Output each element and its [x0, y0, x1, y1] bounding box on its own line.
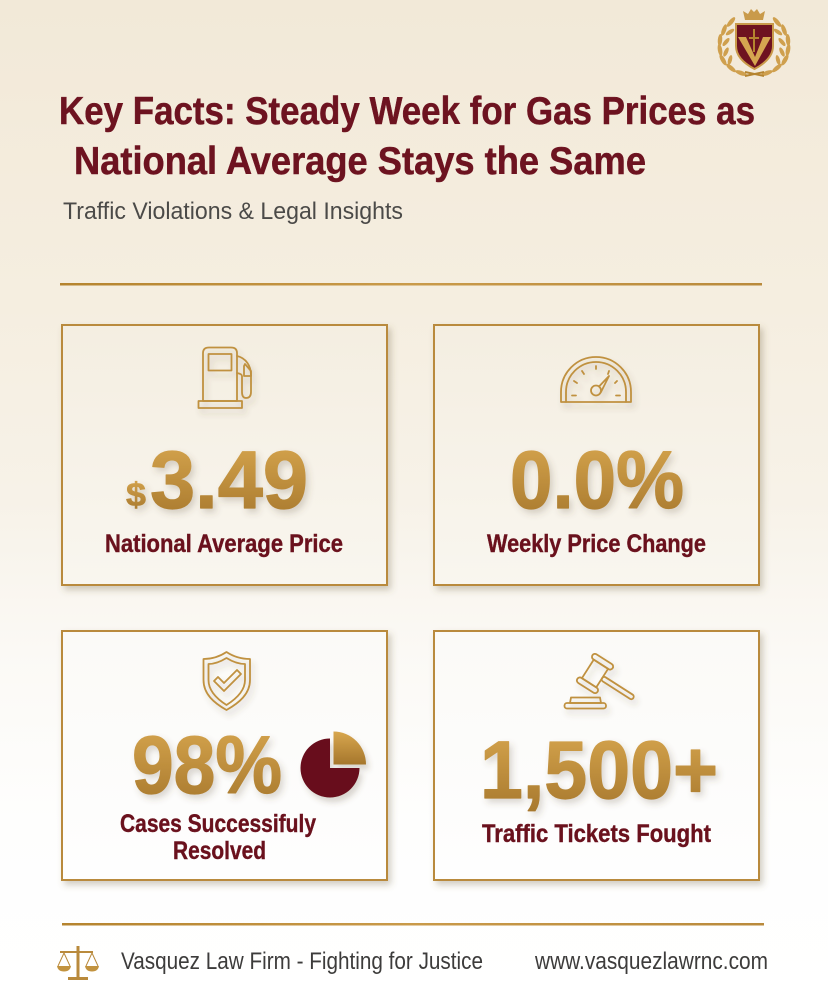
icon: pie chart — [300, 732, 366, 798]
logo: crest with crown and laurels — [717, 9, 791, 77]
panel: cases successfully resolved — [62, 631, 387, 880]
icon: fuel pump — [198, 348, 251, 408]
label: Traffic Tickets Fought — [482, 820, 712, 848]
icon: speedometer gauge — [561, 357, 631, 402]
label — [120, 810, 316, 865]
icon: shield with check — [204, 652, 250, 710]
value: 1,500+: 1,500+ — [480, 725, 718, 816]
icon: gavel — [564, 653, 642, 712]
label: National Average Price — [105, 530, 343, 558]
value: 0.0%: 0.0% — [510, 435, 684, 526]
label: Resolved — [173, 837, 266, 865]
website: www.vasquezlawrnc.com — [534, 948, 768, 975]
label: Weekly Price Change — [487, 530, 706, 558]
value: $3.49: 3.49 — [150, 435, 308, 526]
title: National Average Stays the Same — [74, 140, 646, 183]
panel: traffic tickets fought — [434, 631, 759, 880]
value: 98%: 98% — [132, 720, 282, 811]
subtitle: Traffic Violations & Legal Insights — [63, 198, 403, 225]
label: Cases Successifuly — [120, 810, 316, 838]
firm name: Vasquez Law Firm - Fighting for Justice — [121, 948, 483, 975]
panel: weekly price change — [434, 325, 759, 585]
title: Key Facts: Steady Week for Gas Prices as — [59, 90, 755, 133]
title — [59, 90, 755, 183]
panel: national average price — [62, 325, 387, 585]
icon: scales of justice — [57, 946, 99, 980]
value: $3.49: $ — [126, 476, 146, 513]
footer — [57, 946, 768, 980]
